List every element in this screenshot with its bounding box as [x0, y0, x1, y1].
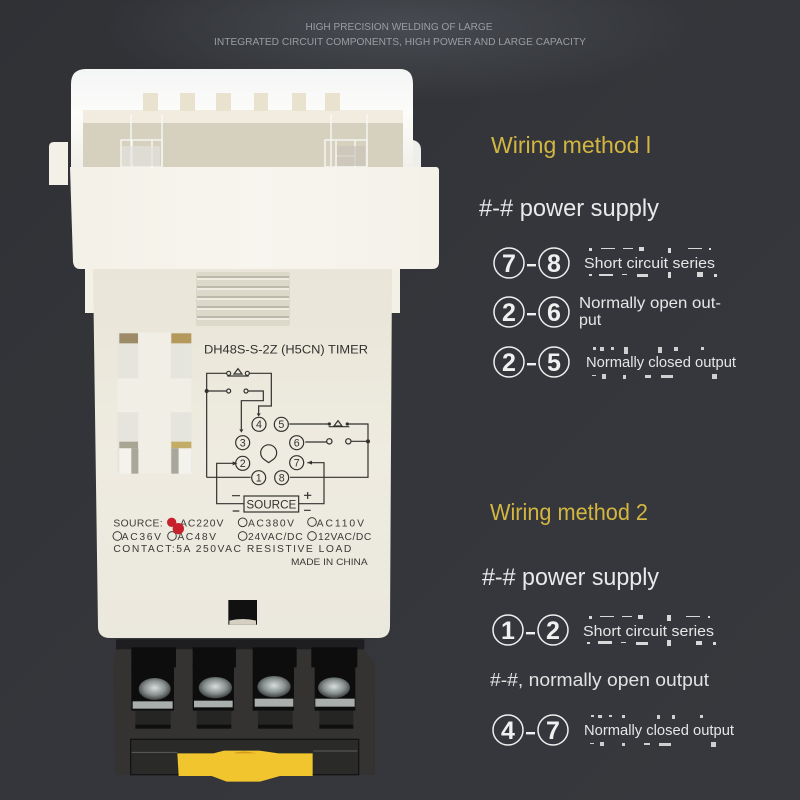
top caption — [214, 21, 586, 48]
terminals 2-5: 5 — [547, 349, 561, 377]
release slot — [228, 600, 257, 625]
voltage options: 12VAC/DC — [318, 532, 372, 543]
yellow latch — [177, 751, 313, 782]
voltage options: AC36V — [122, 532, 161, 543]
label: short circuit series: Short circuit series — [584, 255, 715, 272]
terminals 1-2 — [493, 615, 568, 645]
voltage options: AC220V — [180, 518, 223, 529]
source box text: SOURCE — [246, 497, 296, 511]
normally open output line: #-#, normally open output — [490, 670, 709, 690]
label: normally open output: put — [579, 312, 602, 329]
voltage options: CONTACT:5A 250VAC RESISTIVE LOAD — [113, 544, 351, 555]
label panel in 3x coordinates — [113, 332, 372, 567]
top caption: HIGH PRECISION WELDING OF LARGE — [306, 21, 492, 33]
white band — [70, 167, 439, 269]
label: normally closed output: Normally closed output — [584, 722, 735, 739]
socket housing — [113, 645, 375, 775]
top caption: INTEGRATED CIRCUIT COMPONENTS, HIGH POWER AND LARGE CAPACITY — [214, 36, 586, 48]
terminals 2-6: 2 — [502, 299, 516, 327]
lower terminal recesses — [135, 711, 353, 725]
voltage options: 24VAC/DC — [248, 532, 303, 543]
voltage options — [113, 518, 372, 567]
terminals 4-7 — [493, 715, 568, 745]
terminals 2-5: 2 — [502, 349, 516, 377]
voltage options: AC48V — [177, 532, 216, 543]
base socket in 3x coordinates — [113, 639, 375, 782]
body shoulders — [85, 269, 400, 313]
pin numbers: 6 — [294, 437, 300, 449]
label: normally closed output: Normally closed output — [586, 354, 737, 371]
timer body — [93, 269, 392, 638]
power supply line: #-# power supply — [482, 564, 659, 591]
pin numbers — [240, 419, 300, 484]
transparent lid — [71, 69, 421, 167]
label: normally open output — [579, 295, 721, 329]
label: short circuit series: Short circuit series — [583, 623, 714, 640]
wiring diagram — [207, 369, 368, 512]
voltage options: AC380V — [248, 518, 294, 529]
side tab — [49, 142, 68, 185]
glitched strokes behind short circuit label — [589, 247, 717, 278]
pin numbers: 4 — [256, 419, 262, 431]
glitched strokes behind normally closed label — [592, 347, 717, 379]
model name: DH48S-S-2Z (H5CN) TIMER — [204, 342, 368, 356]
terminals 1-2: 2 — [546, 617, 560, 645]
terminals 4-7: 7 — [546, 717, 560, 745]
voltage options: SOURCE: — [113, 518, 163, 529]
pin numbers: 3 — [240, 437, 246, 449]
panel: wiring method 2 — [482, 499, 735, 747]
glitched strokes behind normally closed label — [590, 715, 716, 747]
terminals 1-2: 1 — [501, 617, 515, 645]
voltage options: MADE IN CHINA — [291, 557, 368, 567]
terminal bays — [131, 647, 357, 711]
pin numbers: 1 — [256, 472, 262, 484]
red selection mark — [167, 518, 184, 534]
vent slots — [196, 272, 290, 326]
power supply line: #-# power supply — [479, 195, 659, 222]
heading: wiring method 1: Wiring method l — [491, 132, 651, 158]
panel: wiring method 1 — [479, 132, 737, 379]
socket window — [117, 332, 192, 474]
glitched strokes behind short circuit label — [587, 615, 716, 646]
screws — [139, 676, 350, 700]
pin numbers: 2 — [240, 458, 246, 470]
terminals 2-6: 6 — [547, 299, 561, 327]
terminals 2-6 — [494, 297, 569, 327]
terminals 7-8 — [494, 248, 569, 278]
terminals 7-8: 7 — [502, 250, 516, 278]
terminal plates — [133, 699, 355, 709]
pin numbers: 5 — [278, 419, 284, 431]
terminals 4-7: 4 — [501, 717, 515, 745]
latch channel — [131, 739, 359, 775]
pin numbers: 8 — [279, 472, 285, 484]
product photo: timer relay — [49, 69, 439, 782]
label: normally open output: Normally open out- — [579, 295, 721, 312]
voltage options: AC110V — [317, 518, 364, 529]
pin numbers: 7 — [294, 457, 300, 469]
terminals 7-8: 8 — [547, 250, 561, 278]
top shadow strip — [116, 639, 364, 649]
terminals 2-5 — [494, 347, 569, 377]
heading: wiring method 2: Wiring method 2 — [490, 499, 648, 525]
